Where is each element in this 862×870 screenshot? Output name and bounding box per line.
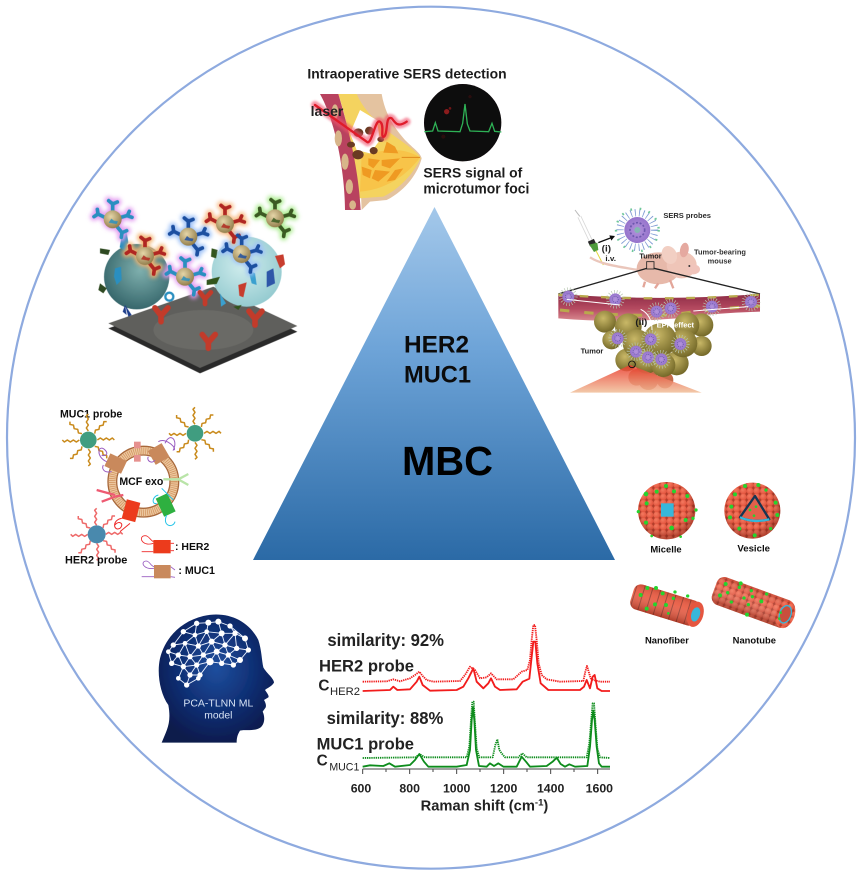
label: EPR effect: EPR effect — [657, 320, 694, 329]
vesicle — [724, 483, 780, 554]
panel: MCF exosome with probes — [60, 407, 221, 578]
labels: Tumor-bearing — [694, 248, 746, 257]
blood vessel — [558, 294, 760, 321]
x axis — [351, 769, 613, 815]
label: Tumor: Tumor — [581, 346, 603, 355]
label: HER2 probe: HER2 probe — [319, 657, 414, 676]
substrate plate — [108, 287, 297, 373]
label: similarity 88%: similarity: 88% — [327, 708, 443, 728]
laser beam — [315, 105, 407, 142]
MUC1 probes — [62, 407, 221, 466]
labels: (i) — [602, 244, 611, 254]
heading: intraoperative SERS detection: Intraoperative SERS detection — [307, 65, 507, 81]
label: C MUC1: MUC1 — [329, 762, 359, 774]
probes with glow — [94, 200, 294, 295]
label: PCA-TLNN ML model: PCA-TLNN ML — [183, 699, 254, 710]
legend: HER2: : HER2 — [175, 542, 210, 553]
label: Tumor on mouse: Tumor — [639, 252, 662, 261]
central triangle — [253, 207, 615, 560]
neural network — [166, 619, 251, 688]
icon: mouse — [590, 242, 700, 288]
chart: Raman spectra — [317, 625, 613, 815]
series: HER2 spectra — [363, 625, 610, 691]
legend: MUC1 — [142, 561, 215, 578]
label: C HER2: HER2 — [330, 686, 360, 698]
label: Micelle: Micelle — [650, 544, 682, 554]
exosome: right sphere — [207, 237, 285, 310]
HER2 probe — [71, 508, 123, 560]
x axis: 600 — [351, 782, 371, 796]
label: MUC1 probe: MUC1 probe — [60, 408, 122, 420]
axis title: ) — [543, 799, 549, 815]
icon: syringe — [575, 210, 615, 265]
label: C HER2: C — [318, 678, 329, 695]
label: C MUC1: C — [317, 753, 328, 770]
label: MBC: MBC — [402, 438, 493, 484]
icon: PCA-TLNN ML model head — [159, 615, 274, 743]
SERS signal scope — [424, 84, 501, 161]
panel: in vivo SERS probes and EPR effect — [558, 209, 760, 393]
receptors — [97, 438, 188, 532]
label: MUC1 probe: MUC1 probe — [317, 734, 414, 753]
illustration: breast cross-section — [311, 94, 422, 210]
panel: nanostructures — [628, 482, 799, 645]
legend: MUC1: : MUC1 — [178, 565, 215, 577]
label: similarity 92%: similarity: 92% — [327, 630, 444, 650]
micelle — [637, 482, 698, 554]
panel: intraoperative SERS detection — [307, 65, 529, 210]
caption: SERS signal of microtumor foci: microtumor foci — [423, 181, 529, 197]
x axis: 800 — [399, 782, 420, 796]
zoom box and lines — [558, 262, 760, 294]
labels — [602, 211, 746, 266]
label: laser: laser — [311, 104, 344, 119]
legend: HER2 — [141, 536, 210, 553]
caption: SERS signal of microtumor foci — [423, 164, 529, 197]
labels: SERS probes — [663, 211, 711, 220]
labels: i.v. — [605, 254, 616, 263]
x axis: 1600 — [586, 782, 613, 796]
label: (ii): (ii) — [635, 317, 647, 327]
label: MUC1: MUC1 — [404, 362, 471, 389]
exosome ring — [108, 446, 179, 517]
panel: exosomes captured on substrate — [94, 200, 297, 373]
label: Nanotube: Nanotube — [733, 635, 776, 645]
tumor mass — [594, 311, 713, 390]
laser cone — [570, 365, 702, 393]
axis title: -1 — [535, 798, 543, 808]
x axis: 1200 — [490, 782, 518, 796]
label: HER2: HER2 — [404, 332, 469, 359]
label: PCA-TLNN ML model — [183, 699, 254, 721]
probes in vessel and tumor — [561, 289, 759, 368]
axis title: Raman shift (cm — [421, 799, 532, 815]
caption: SERS signal of microtumor foci: SERS signal of — [423, 164, 523, 180]
x axis: 1400 — [537, 782, 565, 796]
labels: mouse — [708, 257, 732, 266]
label: C MUC1 — [317, 753, 359, 774]
icon: SERS probe — [616, 209, 659, 251]
nanotube — [709, 575, 799, 645]
label: Vesicle: Vesicle — [737, 544, 770, 554]
nanofiber — [628, 583, 707, 645]
x axis: 1000 — [443, 782, 471, 796]
red antibodies — [155, 292, 262, 348]
label: Nanofiber: Nanofiber — [645, 635, 689, 645]
series: MUC1 spectra — [363, 702, 610, 767]
label: C HER2 — [318, 678, 360, 698]
label: HER2 probe: HER2 probe — [65, 555, 127, 567]
exosome: left sphere — [98, 232, 173, 317]
label: PCA-TLNN ML model: model — [204, 710, 232, 721]
label: MCF exo: MCF exo — [119, 476, 164, 488]
